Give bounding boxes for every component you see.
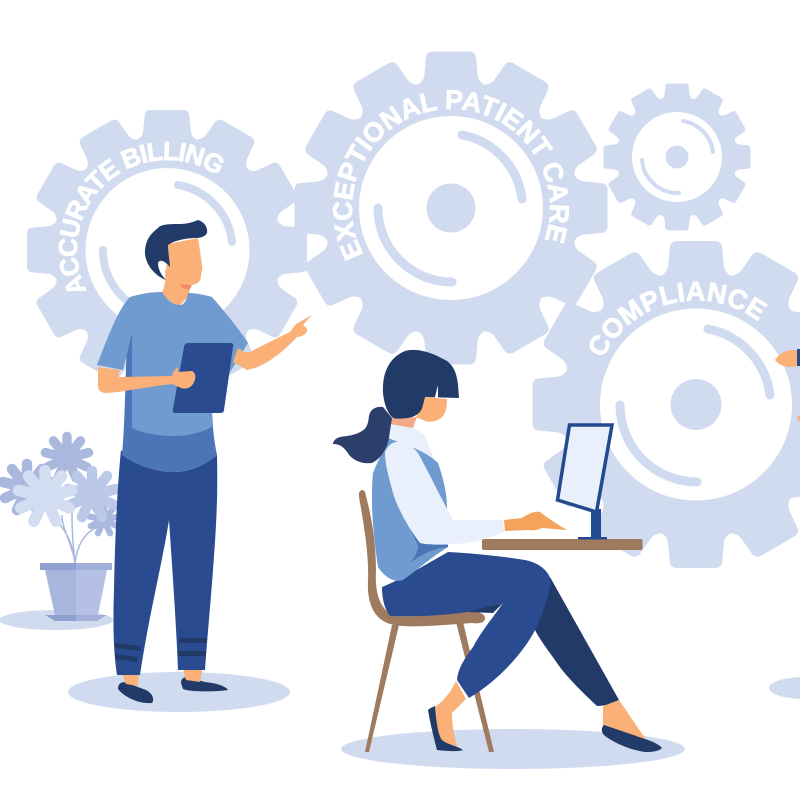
gear: small unlabelled (604, 84, 750, 230)
woman: collar (388, 423, 447, 507)
gear: accurate billing (27, 110, 307, 377)
man: face (166, 238, 202, 285)
woman: hair (383, 350, 459, 419)
man: hair (145, 220, 207, 280)
ground shadow: plant (0, 610, 113, 630)
chair front leg (365, 625, 399, 752)
plant pot (40, 563, 112, 621)
woman: back leg (535, 577, 619, 706)
woman: back shoe (602, 725, 662, 752)
woman: hand (504, 512, 567, 531)
man with tablet (97, 220, 312, 703)
man: shirt hem (122, 333, 217, 472)
woman: fringe slit (435, 385, 438, 398)
woman: trouser shadow (467, 603, 503, 613)
woman: vest shadow (393, 490, 448, 572)
man: neck (161, 270, 192, 307)
woman: back foot (603, 700, 647, 741)
woman: front shoe (428, 706, 463, 751)
man: shirt (97, 292, 248, 436)
gear label: accurate billing: ACCURATE BILLING (58, 142, 224, 292)
woman: front foot (435, 681, 466, 746)
woman: vest (372, 438, 448, 581)
woman: trousers (382, 552, 551, 698)
ground shadow: man (68, 672, 290, 712)
man: shoes (118, 677, 228, 703)
gear label: compliance: COMPLIANCE (589, 282, 768, 355)
chair back and seat (359, 490, 485, 626)
desk (482, 425, 642, 550)
monitor stand (578, 509, 607, 540)
desktop (482, 539, 642, 550)
man: tablet (173, 343, 233, 413)
ground shadow: woman (341, 729, 685, 769)
woman: face (416, 397, 447, 422)
man: hand on tablet (172, 367, 195, 389)
gear label: exceptional patient care: EXCEPTIONAL PATIENT CARE (332, 90, 570, 261)
man: ankles (121, 665, 203, 686)
chair rear leg (456, 622, 494, 752)
partial figure: right edge hand (775, 349, 800, 422)
man: pointing arm (233, 315, 312, 370)
monitor (558, 425, 612, 512)
gear: exceptional patient care (294, 52, 608, 364)
woman: ponytail (333, 407, 392, 463)
ground shadow: right edge (769, 677, 800, 699)
potted plant (3, 436, 118, 621)
woman: neck (390, 417, 417, 428)
man: left arm (98, 367, 195, 393)
woman at desk (333, 350, 662, 752)
chair (359, 490, 494, 752)
gear: compliance (532, 241, 800, 568)
woman: sleeve (385, 442, 504, 545)
man: trousers (113, 450, 217, 675)
